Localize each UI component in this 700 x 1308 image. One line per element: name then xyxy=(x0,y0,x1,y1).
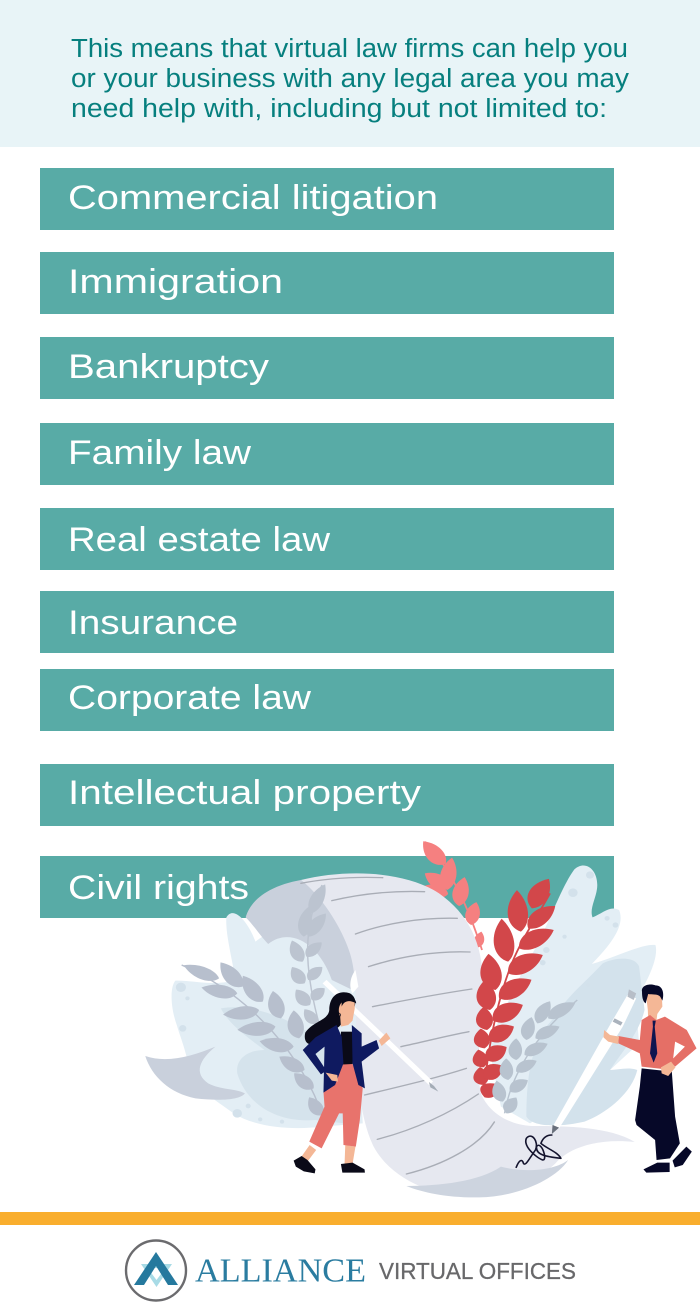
ruled lines on scroll xyxy=(301,877,494,1174)
list item: Intellectual property: Intellectual property xyxy=(68,774,422,812)
gray wheat left xyxy=(181,958,328,1119)
red wheat xyxy=(470,874,560,1101)
list item: Commercial litigation: Commercial litigation xyxy=(68,179,438,217)
woman's pen xyxy=(325,982,438,1092)
signature xyxy=(516,1135,561,1167)
list item: Corporate law xyxy=(40,669,614,731)
logo icon xyxy=(126,1240,186,1300)
header text: or your business with any legal area you may xyxy=(71,65,629,93)
orange divider bar xyxy=(0,1212,700,1225)
list item: Immigration: Immigration xyxy=(68,263,283,301)
list item: Real estate law: Real estate law xyxy=(68,521,330,559)
header panel xyxy=(0,0,700,147)
pale foliage left xyxy=(145,913,363,1128)
illustration: signing a legal scroll xyxy=(145,837,697,1197)
list item: Immigration xyxy=(40,252,614,314)
scroll back curl xyxy=(246,880,354,990)
list item: Corporate law: Corporate law xyxy=(68,679,311,717)
logo wordmark: ALLIANCE xyxy=(195,1252,366,1290)
header text: This means that virtual law firms can help you xyxy=(71,35,628,63)
list item: Real estate law xyxy=(40,508,614,570)
gray wheat upper xyxy=(285,882,331,1037)
figure: man xyxy=(603,985,697,1173)
list item: Insurance: Insurance xyxy=(68,604,238,642)
list item: Bankruptcy: Bankruptcy xyxy=(68,348,270,386)
list item: Bankruptcy xyxy=(40,337,614,399)
header text xyxy=(71,35,629,123)
gray wheat right xyxy=(489,997,578,1116)
list item: Commercial litigation xyxy=(40,168,614,230)
header text: need help with, including but not limited to: xyxy=(71,95,607,123)
list item: Family law: Family law xyxy=(68,434,251,472)
pink wheat xyxy=(416,837,486,950)
list item: Intellectual property xyxy=(40,764,614,826)
list item: Insurance xyxy=(40,591,614,653)
foliage speckles xyxy=(176,871,618,1124)
pale foliage right xyxy=(488,865,656,1125)
figure: woman xyxy=(294,992,390,1173)
list item: Civil rights: Civil rights xyxy=(68,869,249,907)
list item: Civil rights xyxy=(40,856,614,918)
scroll paper xyxy=(301,873,635,1197)
logo tagline: VIRTUAL OFFICES xyxy=(379,1258,576,1284)
logo xyxy=(126,1240,576,1300)
man's pen xyxy=(552,989,636,1134)
list item: Family law xyxy=(40,423,614,485)
